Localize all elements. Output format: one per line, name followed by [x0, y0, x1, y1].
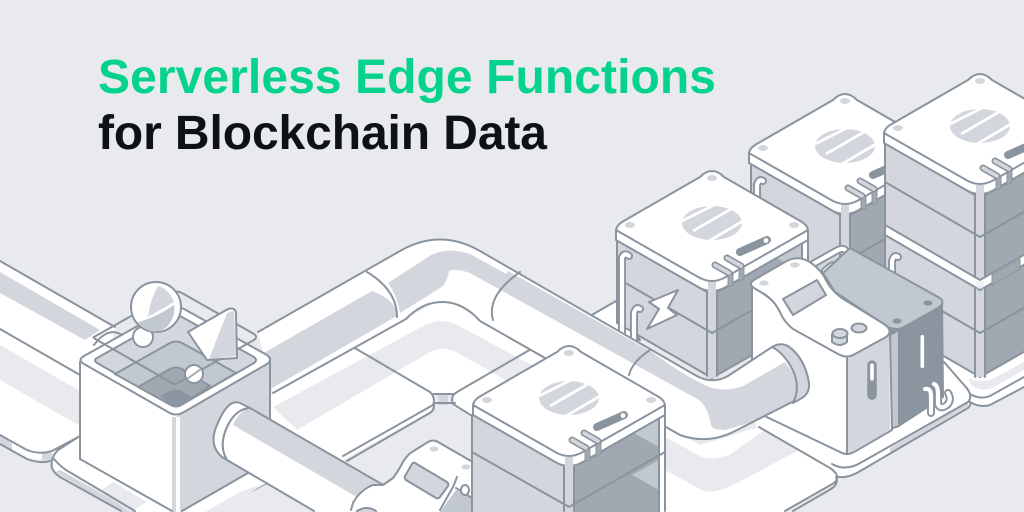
server stack: front — [472, 346, 665, 512]
cables behind camera unit — [813, 249, 848, 272]
server stack: back middle — [749, 94, 941, 333]
left pipe and platform — [0, 261, 115, 462]
cube platform — [52, 400, 267, 512]
cube — [80, 292, 270, 512]
title — [98, 51, 716, 160]
server stack: back right — [884, 74, 1024, 377]
cable on middle server — [757, 180, 763, 198]
floor tiles — [200, 298, 837, 512]
cables at back unit — [925, 384, 950, 413]
cable on right server — [892, 256, 898, 278]
floating frame — [93, 292, 256, 384]
platform: under devices — [740, 362, 970, 477]
camera unit — [751, 258, 892, 454]
big pipe — [255, 240, 802, 439]
title: for Blockchain Data — [98, 107, 547, 160]
pipe end ring — [772, 344, 809, 403]
icon: lightning — [647, 290, 678, 329]
title: Serverless Edge Functions — [98, 51, 716, 104]
base under lightning server — [590, 301, 640, 340]
platform: far right tile — [900, 330, 1024, 406]
server stack: lightning — [616, 171, 808, 378]
icon: sphere — [131, 282, 181, 332]
icon: pyramid — [188, 309, 237, 360]
icon: striped small sphere — [185, 365, 203, 383]
pipe from cube — [213, 402, 392, 512]
icon: sphere small — [133, 327, 153, 347]
small device at bottom — [350, 440, 478, 512]
cables on lightning server — [622, 254, 640, 340]
back unit — [823, 248, 943, 429]
